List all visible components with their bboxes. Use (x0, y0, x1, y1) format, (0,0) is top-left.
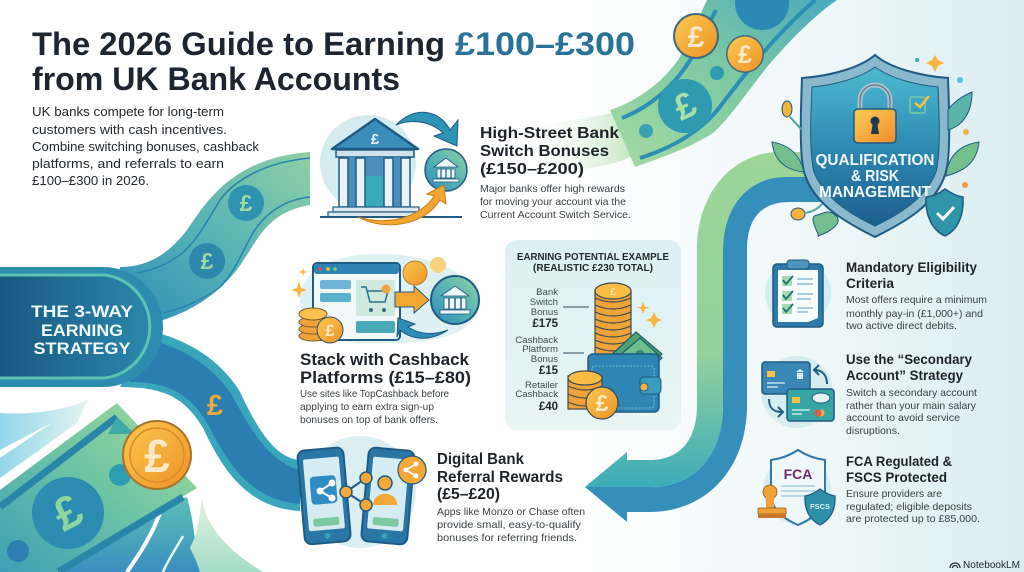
arrow: from shield down to left (585, 152, 830, 522)
text: FCA description: regulated; eligible deposits (846, 502, 972, 513)
text: referral description (437, 507, 585, 544)
notebooklm mark: NotebookLM (963, 559, 1020, 571)
text: referral description: provide small, easy-to-qualify (437, 520, 582, 531)
label: cashback platform bonus: Cashback (515, 335, 558, 346)
coin top (673, 13, 719, 59)
heading: digital bank referral rewards: Digital Bank (437, 451, 524, 468)
label: cashback platform bonus: Bonus (531, 354, 558, 365)
cash notes (608, 332, 662, 376)
icon: FCA shield and stamp: FSCS (810, 502, 830, 511)
text: referral description: bonuses for referring friends. (437, 533, 577, 544)
flow: banknote ribbon top right (520, 0, 837, 175)
text: bank switch description: Current Account Switch Service. (480, 210, 631, 221)
intro text: £100–£300 in 2026. (32, 173, 149, 188)
text: eligibility description (846, 295, 987, 332)
text: cashback description (300, 389, 449, 426)
pill: the 3-way earning strategy: EARNING (41, 321, 123, 340)
wallet (588, 354, 661, 412)
shield label: QUALIFICATION (816, 152, 934, 169)
label: bank switch bonus: £175 (532, 318, 559, 330)
label: bank switch bonus: Bonus (531, 307, 558, 318)
text: secondary account description (846, 388, 977, 437)
icon: bank with arrows: £ (371, 131, 380, 148)
title: The 2026 Guide to Earning (32, 26, 445, 62)
pound sign on lower band: £ (207, 390, 223, 422)
text: FCA description: are protected up to £85,000. (846, 514, 980, 525)
icon: clipboard (765, 260, 831, 327)
heading: stack with cashback platforms: Platforms (£15–£80) (300, 368, 471, 387)
heading: high-street bank switch bonuses (480, 125, 619, 178)
pill: the 3-way earning strategy (0, 267, 163, 387)
title (32, 26, 635, 97)
label: retailer cashback: Retailer (525, 380, 559, 391)
heading: stack with cashback platforms (300, 350, 471, 387)
text: FCA description (846, 489, 980, 525)
shield label (816, 152, 934, 201)
icon: cashback browser: £ (325, 321, 335, 340)
small coin stack: £ (596, 390, 609, 416)
leaves and sparkles around shield (772, 55, 979, 236)
icon: bank with arrows (320, 112, 467, 225)
heading: high-street bank switch bonuses: Switch Bonuses (480, 143, 609, 160)
title: £100–£300 (455, 26, 635, 62)
text: cashback description: applying to earn extra sign-up (300, 402, 434, 413)
text: referral description: Apps like Monzo or Chase often (437, 507, 585, 518)
pound circle on band (228, 185, 264, 221)
text: FCA description: Ensure providers are (846, 489, 942, 500)
icon: small check shield (926, 189, 963, 236)
intro text: platforms, and referrals to earn (32, 156, 224, 171)
shield: qualification and risk management (801, 55, 949, 237)
heading: mandatory eligibility: Mandatory Eligibility (846, 259, 977, 275)
heading: high-street bank switch bonuses: (£150–£200) (480, 161, 584, 178)
pill: the 3-way earning strategy: THE 3-WAY (31, 302, 134, 321)
label: bank switch bonus: Bank (536, 287, 558, 298)
shield label: MANAGEMENT (819, 184, 932, 201)
icon: phones referral (297, 436, 426, 548)
heading: high-street bank switch bonuses: High-Street Bank (480, 125, 619, 142)
panel heading: EARNING POTENTIAL EXAMPLE (517, 252, 669, 263)
heading: digital bank referral rewards (437, 451, 563, 503)
shield label: & RISK (851, 168, 900, 185)
label: retailer cashback (515, 380, 559, 413)
pill: the 3-way earning strategy: STRATEGY (34, 339, 131, 358)
heading: FCA and FSCS (846, 453, 952, 485)
text: secondary account description: disruptions. (846, 426, 900, 437)
pound circle on band lower: £ (201, 248, 214, 274)
label: retailer cashback: £40 (539, 401, 558, 413)
text: secondary account description: rather than your main salary (846, 401, 977, 412)
heading: secondary account: Use the “Secondary (846, 351, 972, 367)
wisps and banknote bottom left (0, 400, 263, 572)
flow: upper branch to bank bonuses (120, 152, 310, 330)
flow: banknote ribbon top right: £ (667, 83, 703, 128)
text: cashback description: Use sites like TopCashback before (300, 389, 449, 400)
coin large (122, 420, 192, 490)
intro text: UK banks compete for long-term (32, 104, 224, 119)
text: eligibility description: Most offers require a minimum (846, 295, 987, 306)
heading: digital bank referral rewards: Referral Rewards (437, 469, 563, 486)
icon: swapping cards (761, 356, 834, 428)
coin stack tall: £ (610, 287, 616, 298)
pound circle on band lower (189, 243, 225, 279)
label: cashback platform bonus (515, 335, 584, 377)
pound circle on band: £ (240, 190, 253, 216)
text: cashback description: bonuses on top of bank offers. (300, 415, 438, 426)
label: bank switch bonus: Switch (530, 297, 558, 308)
label: retailer cashback: Cashback (515, 389, 558, 400)
heading: stack with cashback platforms: Stack with Cashback (300, 350, 470, 369)
panel heading: (REALISTIC £230 TOTAL) (533, 263, 653, 274)
heading: mandatory eligibility (846, 259, 977, 291)
icon: cashback browser (291, 254, 479, 343)
banknote (0, 403, 197, 572)
heading: FCA and FSCS: FCA Regulated & (846, 453, 952, 469)
coin top small: £ (738, 41, 752, 69)
small coin stack (568, 371, 618, 419)
icon: FCA shield and stamp: FCA (784, 466, 812, 482)
text: bank switch description (480, 184, 631, 221)
text: eligibility description: two active direct debits. (846, 321, 957, 332)
label: bank switch bonus (530, 287, 589, 330)
heading: mandatory eligibility: Criteria (846, 275, 894, 291)
heading: secondary account: Account” Strategy (846, 367, 963, 383)
intro text (32, 104, 259, 188)
label: cashback platform bonus: Platform (522, 344, 558, 355)
sparkles (636, 302, 662, 328)
intro text: customers with cash incentives. (32, 122, 227, 137)
text: bank switch description: Major banks offer high rewards (480, 184, 625, 195)
heading: secondary account (846, 351, 972, 383)
text: secondary account description: account to avoid service (846, 413, 960, 424)
flow: lower branch to referral rewards (120, 331, 300, 511)
text: eligibility description: monthly pay-in (£1,000+) and (846, 309, 983, 320)
coin top: £ (688, 21, 705, 54)
coin stack tall (595, 283, 631, 365)
heading: digital bank referral rewards: (£5–£20) (437, 486, 500, 503)
title: from UK Bank Accounts (32, 61, 400, 97)
text: secondary account description: Switch a secondary account (846, 388, 977, 399)
banknote: £ (44, 483, 91, 541)
panel heading (517, 252, 669, 274)
icon: checkbox (910, 96, 929, 113)
panel: earning potential example (505, 240, 681, 430)
heading: FCA and FSCS: FSCS Protected (846, 469, 947, 485)
label: cashback platform bonus: £15 (539, 365, 559, 377)
coin top small (726, 35, 764, 73)
coin large: £ (144, 430, 170, 482)
icon: padlock (854, 85, 896, 143)
text: bank switch description: for moving your account via the (480, 197, 626, 208)
icon: FCA shield and stamp (758, 450, 835, 525)
intro text: Combine switching bonuses, cashback (32, 139, 259, 154)
